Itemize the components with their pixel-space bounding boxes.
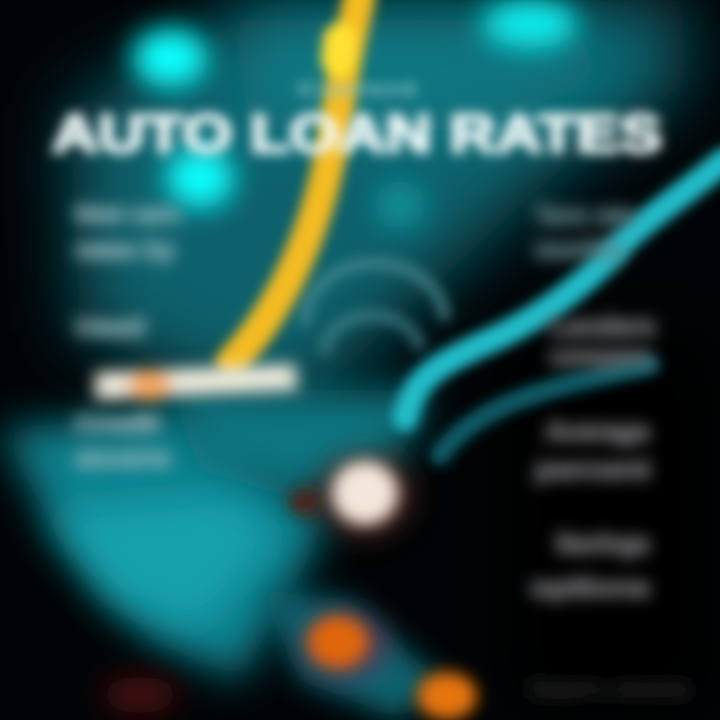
white data point [289, 453, 413, 537]
title: AUTO LOAN RATES [52, 104, 662, 164]
left text blocks: rates by [75, 237, 176, 264]
text block: footer: learn more [530, 673, 690, 703]
text block: left 1: New cars [75, 201, 180, 228]
orange data point 1 [303, 613, 387, 677]
orange data point 2 [417, 672, 477, 720]
right text blocks: options [530, 572, 650, 602]
right text blocks: monthly [535, 234, 625, 264]
white highlighted label with orange marker [95, 364, 298, 401]
right text blocks: compare [550, 341, 650, 371]
left text blocks [75, 201, 180, 472]
right text blocks: percent [535, 454, 650, 484]
text block: right 4: Savings [555, 528, 650, 558]
left text blocks: score [75, 445, 170, 472]
title: Current [297, 79, 418, 101]
text block: right 3: Average [545, 416, 650, 446]
text block: right 1: Term rate [535, 200, 635, 230]
cyan rate line [405, 160, 720, 455]
dark red spot [102, 677, 178, 713]
text block: left 3: Credit [75, 411, 160, 438]
text block: left 2: Used [75, 314, 145, 341]
text block: right 2: Lenders [550, 311, 655, 341]
yellow rising rate line [232, 0, 360, 362]
gauge arcs [305, 263, 445, 355]
glow: cyan spots [132, 0, 578, 229]
right text blocks [530, 200, 690, 703]
title [52, 79, 662, 164]
